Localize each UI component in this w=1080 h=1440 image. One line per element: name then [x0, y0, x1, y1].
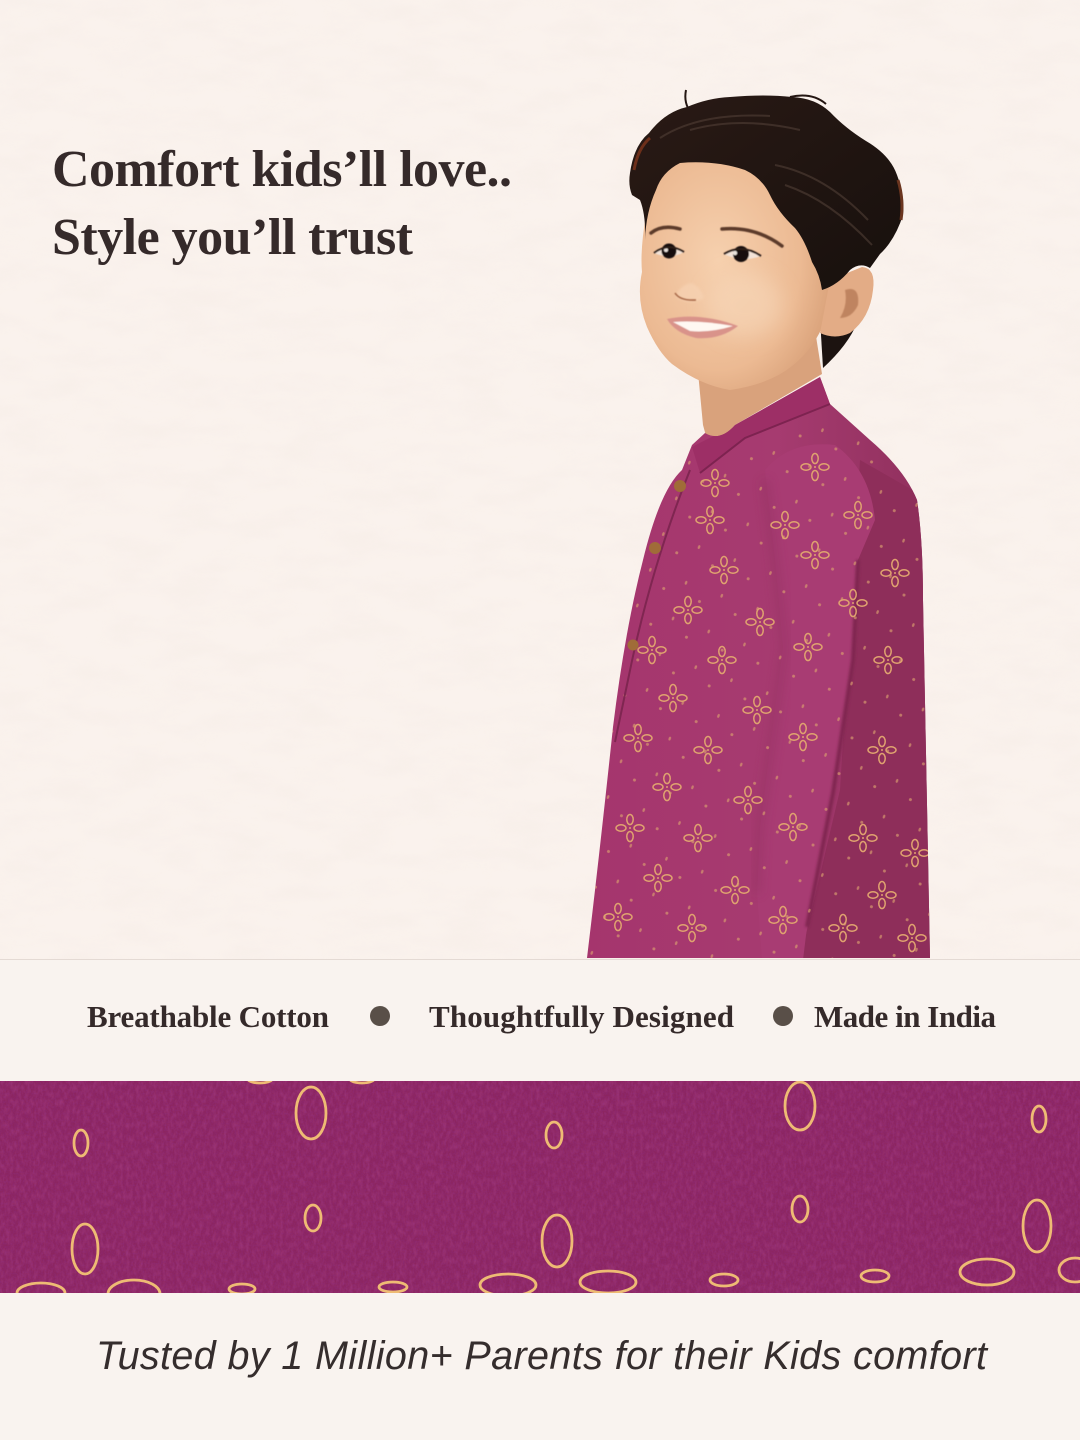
title: Comfort kids’ll love.. — [52, 141, 512, 198]
feature: made in india: Made in India — [814, 999, 996, 1034]
feature strip — [87, 999, 996, 1034]
neck — [698, 330, 822, 438]
cheek glow — [707, 273, 783, 337]
title: Style you’ll trust — [52, 209, 414, 266]
eyes — [654, 244, 761, 262]
feature: breathable cotton: Breathable Cotton — [87, 999, 329, 1034]
tagline: Tusted by 1 Million+ Parents for their Kids comfort — [96, 1334, 989, 1378]
face — [640, 130, 835, 390]
boy in pink kurta — [580, 90, 940, 960]
sleeve — [800, 444, 875, 958]
collar — [692, 376, 830, 473]
kurta — [580, 370, 940, 960]
fabric swatch band — [0, 1075, 1080, 1308]
title — [52, 141, 512, 266]
hair behind ear — [821, 290, 860, 368]
icon: ear — [820, 267, 874, 336]
back panel — [800, 460, 935, 960]
feature: thoughtfully designed: Thoughtfully Designed — [429, 999, 734, 1034]
buttons — [628, 480, 686, 650]
bullet — [773, 1006, 793, 1026]
hair — [629, 90, 903, 290]
divider — [0, 959, 1080, 960]
nose — [676, 283, 704, 302]
placket — [615, 470, 690, 742]
motifs — [604, 454, 929, 952]
eyebrows — [651, 227, 782, 246]
bullet — [370, 1006, 390, 1026]
smile — [667, 317, 738, 338]
